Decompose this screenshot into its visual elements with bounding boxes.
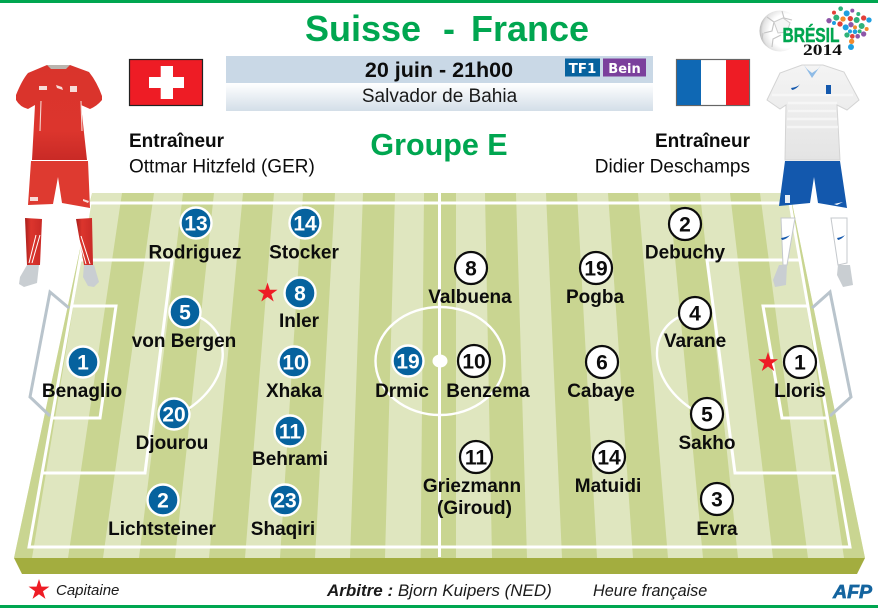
player: Xhaka: 10 (282, 352, 306, 374)
kit: Switzerland (16, 65, 102, 287)
player: Drmic: 19 (396, 350, 420, 374)
kit: France (767, 65, 859, 287)
title: France (461, 8, 589, 49)
bottom green rule (0, 605, 878, 608)
logo: Brésil 2014 (760, 6, 872, 59)
player: Griezmann (Giroud) (423, 441, 521, 519)
logo: Brésil 2014: 2014 (803, 42, 842, 59)
player: Evra: Evra (696, 519, 738, 540)
player: Rodriguez: 13 (184, 212, 208, 236)
player: Benaglio: 1 (77, 352, 89, 374)
player: Debuchy: Debuchy (645, 242, 726, 264)
pitch surface (14, 193, 865, 558)
player: Lichtsteiner: 2 (157, 490, 169, 512)
player: Matuidi: Matuidi (575, 476, 641, 497)
legend: captain (29, 579, 119, 599)
player: Matuidi: 14 (597, 446, 621, 470)
socks (25, 218, 42, 265)
flag: France (676, 60, 750, 106)
player: Cabaye: Cabaye (567, 381, 635, 402)
coach: Switzerland: Ottmar Hitzfeld (GER) (129, 156, 315, 178)
icon: captain star Inler (258, 282, 277, 301)
player: von Bergen: 5 (179, 302, 191, 324)
boots (773, 265, 787, 287)
player: Evra: 3 (711, 488, 723, 512)
heading: group: Groupe E (370, 128, 508, 162)
player: Sakho: Sakho (678, 433, 736, 454)
player: Drmic: Drmic (375, 381, 429, 402)
player: Cabaye (567, 346, 635, 402)
player: Benzema: 10 (462, 350, 486, 374)
player: Lloris: Lloris (774, 381, 826, 402)
pitch markings (29, 193, 850, 557)
player: Behrami (252, 416, 328, 470)
referee note: Arbitre : Bjorn Kuipers (NED) (326, 581, 552, 600)
badge: Bein (603, 58, 646, 77)
player: Xhaka (266, 346, 322, 402)
player: Stocker: Stocker (269, 242, 339, 264)
title: Suisse (305, 8, 421, 49)
player: Rodriguez: Rodriguez (149, 242, 241, 264)
player: Stocker: 14 (293, 212, 317, 236)
player: Djourou: 20 (162, 404, 186, 426)
player: Matuidi (575, 441, 641, 497)
coach: France (595, 131, 751, 178)
player: Shaqiri (251, 484, 315, 540)
legend: captain: Capitaine (56, 582, 119, 599)
match venue: Salvador de Bahia (362, 86, 518, 107)
player: Inler (279, 278, 320, 332)
player: Djourou: Djourou (136, 433, 208, 454)
title: - (433, 8, 455, 49)
flag: Switzerland (130, 60, 202, 106)
player: Behrami: 11 (279, 420, 301, 444)
badge: TF1: TF1 (569, 61, 596, 77)
player: Valbuena: 8 (465, 258, 477, 280)
coach: France: Entraîneur (655, 131, 751, 152)
coach: Switzerland: Entraîneur (129, 131, 225, 152)
top green rule (0, 0, 878, 3)
player: Varane: Varane (664, 331, 726, 352)
shirt (16, 65, 102, 160)
player: Varane: 4 (689, 302, 701, 326)
player: Benaglio (42, 346, 122, 402)
player: Pogba (566, 252, 624, 308)
socks (781, 218, 795, 265)
badge: TF1 (565, 58, 600, 77)
player: Xhaka: Xhaka (266, 381, 322, 402)
player: Debuchy (645, 208, 726, 264)
player: Drmic (375, 346, 429, 402)
player: Lloris (774, 346, 826, 402)
player: Pogba: Pogba (566, 287, 624, 308)
player: Pogba: 19 (584, 258, 608, 280)
player: von Bergen (132, 296, 236, 352)
icon: captain star Lloris (758, 352, 778, 371)
player: Djourou (136, 398, 208, 454)
left goal (30, 292, 69, 416)
player: Shaqiri: 23 (273, 490, 297, 512)
player: Griezmann (Giroud): 11 (465, 446, 487, 470)
right goal (812, 292, 851, 416)
player: Evra (696, 483, 738, 540)
player: Lichtsteiner (108, 484, 216, 540)
lineup: France (423, 208, 826, 540)
player: Inler: 8 (294, 282, 306, 306)
player: Griezmann (Giroud): (Giroud) (437, 498, 512, 519)
player: Debuchy: 2 (679, 214, 691, 236)
panel: football pitch (14, 193, 865, 574)
logo: Brésil 2014: BRÉSIL (782, 24, 840, 47)
logo: AFP: AFP (832, 581, 873, 602)
player: Varane (664, 297, 726, 352)
player: Valbuena: Valbuena (428, 287, 512, 308)
player: Sakho (678, 398, 736, 454)
player: Sakho: 5 (701, 404, 713, 426)
badge: Bein: Bein (608, 62, 641, 77)
player: Behrami: Behrami (252, 449, 328, 470)
player: Inler: Inler (279, 311, 320, 332)
player: Shaqiri: Shaqiri (251, 519, 315, 540)
player: von Bergen: von Bergen (132, 331, 236, 352)
player: Stocker (269, 208, 339, 264)
boots (19, 265, 39, 287)
player: Lloris: 1 (794, 352, 806, 374)
time note: Heure française (593, 582, 707, 600)
match date and time: 20 juin - 21h00 (365, 58, 513, 82)
player: Rodriguez (149, 208, 241, 264)
pitch side edge (14, 558, 865, 574)
shirt (767, 65, 859, 160)
shorts (28, 161, 90, 208)
coach: Switzerland (129, 131, 315, 178)
coach: France: Didier Deschamps (595, 156, 750, 178)
player: Benaglio: Benaglio (42, 381, 122, 402)
panel: match info (226, 56, 653, 111)
shorts (779, 161, 847, 208)
player: Benzema (446, 345, 530, 402)
player: Griezmann (Giroud): Griezmann (423, 476, 521, 497)
player: Lichtsteiner: Lichtsteiner (108, 519, 216, 540)
player: Valbuena (428, 252, 512, 308)
player: Cabaye: 6 (596, 352, 608, 374)
lineup: Switzerland (42, 208, 429, 540)
player: Benzema: Benzema (446, 381, 530, 402)
pitch stripes (14, 193, 865, 558)
